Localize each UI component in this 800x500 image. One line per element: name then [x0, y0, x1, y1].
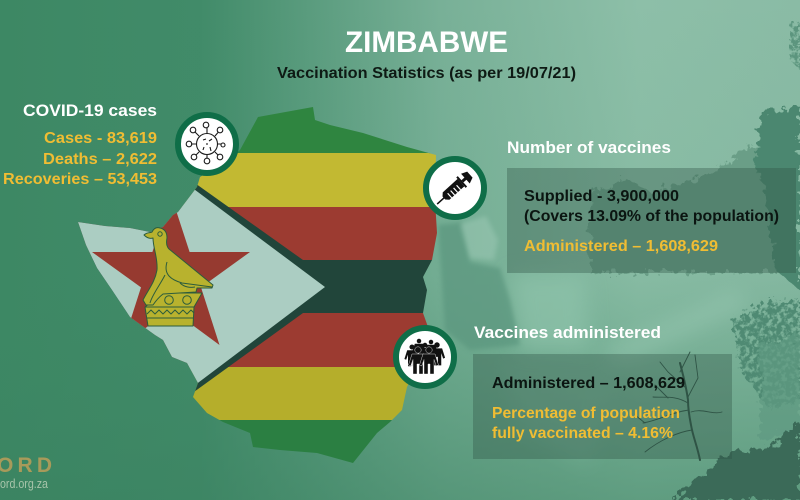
stat: cases: Cases - 83,619	[44, 130, 157, 147]
title: ZIMBABWE	[345, 26, 508, 59]
stat: coverage: (Covers 13.09% of the population)	[524, 208, 779, 225]
heading: COVID-19 cases: COVID-19 cases	[23, 101, 157, 120]
heading: number of vaccines: Number of vaccines	[507, 138, 671, 157]
stat: recoveries: Recoveries – 53,453	[3, 171, 157, 188]
stat: administered: Administered – 1,608,629	[492, 375, 685, 392]
box background	[507, 168, 796, 273]
stat: supplied: Supplied - 3,900,000	[524, 188, 679, 205]
icon: group of people	[396, 328, 454, 386]
map of Zimbabwe in flag colours	[78, 107, 437, 463]
stat: percentage line two: fully vaccinated – 4.16%	[492, 425, 673, 442]
stat: percentage line one: Percentage of population	[492, 405, 680, 422]
subtitle: Vaccination Statistics (as per 19/07/21)	[277, 65, 576, 82]
illustration: bare tree	[635, 352, 722, 460]
logo web address: ord.org.za	[0, 476, 49, 491]
box background	[473, 354, 732, 459]
icon: virus	[178, 115, 236, 173]
heading: vaccines administered: Vaccines administered	[474, 323, 661, 342]
icon: Zimbabwe bird emblem	[143, 228, 213, 326]
stat: administered: Administered – 1,608,629	[524, 238, 718, 255]
panel: number of vaccines	[507, 138, 796, 273]
icon: syringe	[426, 159, 484, 217]
panel: vaccines administered	[473, 323, 732, 459]
panel: COVID-19 cases	[3, 101, 157, 188]
logo	[0, 454, 52, 491]
stat: deaths: Deaths – 2,622	[43, 151, 157, 168]
